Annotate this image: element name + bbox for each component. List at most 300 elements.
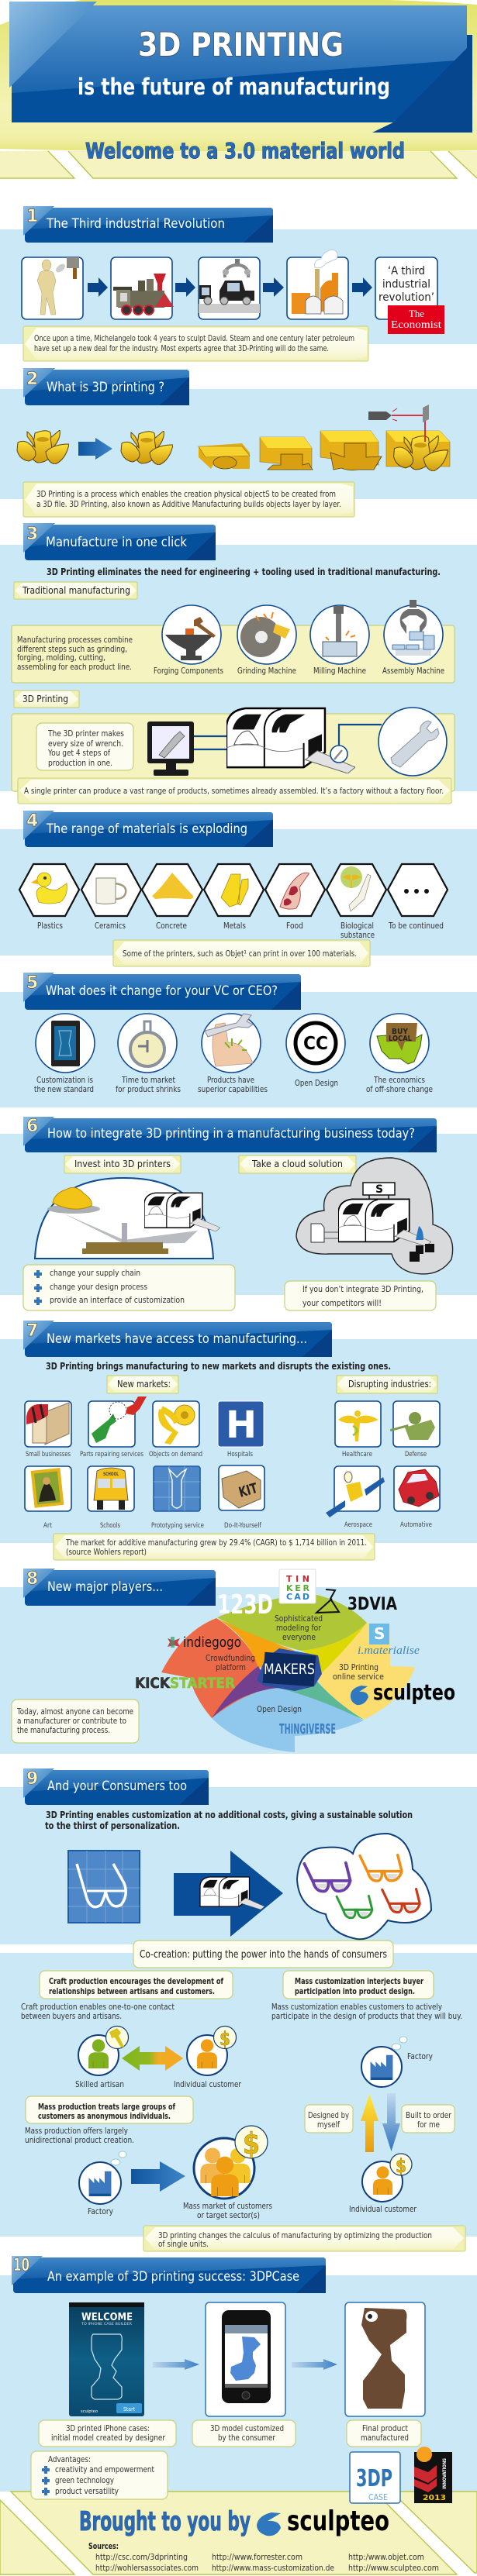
captions: case steps bbox=[39, 2420, 421, 2447]
labels: markets: Small businesses bbox=[26, 1451, 71, 1458]
arrow: step two bbox=[292, 2359, 337, 2370]
heading: section 4 bbox=[23, 811, 273, 847]
icon: customer: $ bbox=[396, 2155, 406, 2177]
label: makers bbox=[257, 1648, 322, 1691]
logo: 3DP Case: CASE bbox=[368, 2493, 388, 2502]
text block: advantages: creativity and empowerment bbox=[55, 2465, 154, 2474]
illustration: customized iPhone model bbox=[206, 2302, 285, 2416]
heading: section 2: What is 3D printing ? bbox=[47, 380, 164, 395]
title banner: 3D PRINTING bbox=[138, 26, 344, 64]
heading: section 7: New markets have access to manufacturing... bbox=[47, 1331, 307, 1347]
icon: customized phone bbox=[36, 1014, 95, 1073]
panel: mass production: customers as anonymous individuals. bbox=[38, 2112, 171, 2121]
text block: invest benefits: change your supply chain bbox=[50, 1269, 140, 1278]
callout: market growth: The market for additive manufacturing grew by 29.4% (CAGR) to $ 1,714 billion in 2011. bbox=[65, 1538, 367, 1548]
icon: layer two bbox=[260, 437, 313, 470]
labels: business changes: for product shrinks bbox=[116, 1085, 181, 1094]
panel: mass production bbox=[26, 2096, 193, 2123]
text: built to order: Built to order bbox=[406, 2111, 452, 2120]
icon: layer one bbox=[199, 443, 250, 469]
icon: printer in arrow bbox=[200, 1877, 264, 1910]
label: factory: Factory bbox=[407, 2052, 433, 2061]
labels: markets: Schools bbox=[100, 1522, 120, 1530]
callout: calculus of manufacturing: of single units. bbox=[158, 2240, 209, 2249]
quote: a third industrial revolution bbox=[378, 265, 434, 304]
heading: section 1 bbox=[23, 206, 273, 243]
labels: materials: To be continued bbox=[388, 921, 444, 931]
labels: business changes: Time to market bbox=[121, 1076, 175, 1085]
segment labels: everyone bbox=[282, 1633, 316, 1642]
quote: a third industrial revolution: revolution’ bbox=[378, 291, 434, 304]
segment: teal bbox=[279, 1678, 364, 1720]
segment labels: Crowdfunding bbox=[206, 1654, 255, 1663]
arrows between cards bbox=[88, 277, 372, 297]
icon: aerospace bbox=[326, 1466, 385, 1517]
icon: creative commons: CC bbox=[303, 1034, 328, 1054]
callout: Michelangelo note bbox=[23, 326, 368, 361]
logo: The Economist bbox=[388, 305, 444, 334]
text block: sources: http://csc.com/3dprinting bbox=[95, 2553, 188, 2562]
labels: materials: substance bbox=[340, 931, 375, 940]
labels: or target sector(s) bbox=[197, 2211, 260, 2220]
heading: section 10 bbox=[12, 2256, 326, 2293]
text block: advantages bbox=[31, 2451, 168, 2499]
text block: advantages: product versatility bbox=[55, 2487, 119, 2496]
arrow: one way bbox=[131, 2161, 185, 2192]
text: designed by myself bbox=[305, 2105, 353, 2133]
diagram: mass customization loop bbox=[305, 2037, 455, 2214]
heading: section 7 bbox=[23, 1321, 332, 1357]
tag: new markets bbox=[107, 1376, 178, 1393]
logo: The Economist: The bbox=[409, 308, 424, 319]
illustration: case app screen bbox=[69, 2302, 144, 2416]
hexagons: materials bbox=[19, 864, 448, 940]
text block: advantages: green technology bbox=[55, 2476, 114, 2485]
labels: Factory bbox=[88, 2207, 113, 2216]
segment: lime bbox=[301, 1623, 367, 1675]
callout: over 100 materials bbox=[113, 940, 370, 966]
icon: parts repair bbox=[88, 1396, 147, 1447]
callout: Michelangelo note: Once upon a time, Michelangelo took 4 years to sculpt David. Steam and one century later petroleum bbox=[34, 334, 354, 343]
text block: invest benefits bbox=[23, 1265, 235, 1310]
labels: business changes: The economics bbox=[373, 1076, 425, 1085]
badge: best of innovations 2013 bbox=[414, 2447, 452, 2503]
label: individual customer: Individual customer bbox=[349, 2205, 417, 2214]
heading: section 1: The Third industrial Revolution bbox=[46, 216, 225, 232]
labels: materials: Ceramics bbox=[95, 921, 126, 931]
title banner bbox=[0, 0, 477, 178]
tag: take a cloud solution bbox=[239, 1155, 356, 1173]
text: mass production description: Mass production offers largely bbox=[25, 2127, 128, 2136]
labels: Mass market of customers bbox=[183, 2202, 272, 2211]
callout: calculus of manufacturing bbox=[143, 2226, 465, 2251]
text block: sources: http://www.mass-customization.de bbox=[212, 2564, 334, 2573]
callout: definition of 3D printing: a 3D file. 3D Printing, also known as Additive Manufacturing builds objects layer by layer. bbox=[36, 500, 341, 509]
icon: metal bars bbox=[221, 874, 248, 907]
icon: buy local bbox=[370, 1014, 429, 1073]
icon: school bus: SCHOOL bbox=[103, 1472, 119, 1477]
illustration: co-creation flow bbox=[68, 1834, 431, 1939]
title banner: Welcome to a 3.0 material world bbox=[85, 138, 405, 164]
heading: section 10: An example of 3D printing success: 3DPCase bbox=[47, 2269, 299, 2285]
icon: buy local: LOCAL bbox=[389, 1035, 413, 1043]
quote: a third industrial revolution: industrial bbox=[382, 278, 430, 291]
segment labels: platform bbox=[216, 1663, 246, 1672]
panel: traditional manufacturing: forging, molding, cutting, bbox=[17, 653, 105, 663]
text block: wrench bbox=[36, 723, 133, 770]
callout: market growth: (source Wohlers report) bbox=[66, 1548, 147, 1557]
icon: artisan bbox=[78, 2026, 129, 2075]
grid: markets bbox=[25, 1396, 440, 1530]
logo: 123D: Autodesk bbox=[217, 1594, 241, 1600]
text block: competitors: your competitors will! bbox=[302, 1299, 382, 1308]
footer: brought to you by sculpteo: sculpteo bbox=[287, 2505, 389, 2537]
icon: grinding bbox=[237, 605, 296, 664]
heading: section 3: 3 bbox=[26, 525, 38, 544]
icon: refinery bbox=[292, 250, 343, 314]
heading: section 3 bbox=[23, 523, 216, 560]
captions: case steps: Final product bbox=[362, 2424, 408, 2433]
arrow: up bbox=[361, 2094, 378, 2152]
illustration: case app screen: WELCOME bbox=[81, 2312, 133, 2323]
labels: business changes: Products have bbox=[207, 1076, 254, 1085]
labels: markets: Art bbox=[43, 1522, 52, 1530]
heading: section 2 bbox=[23, 368, 189, 405]
text: craft description: Craft production enables one-to-one contact bbox=[21, 2003, 175, 2012]
panel: traditional manufacturing: Manufacturing processes combine bbox=[17, 635, 133, 645]
labels: materials: Food bbox=[286, 921, 303, 931]
illustration: balance scale bbox=[35, 1178, 220, 1259]
logo: Kickstarter: KICKSTARTER bbox=[135, 1675, 235, 1692]
tag: 3D printing: 3D Printing bbox=[22, 693, 68, 704]
text: designed by myself: myself bbox=[317, 2120, 340, 2130]
icon: prototyping bbox=[154, 1466, 200, 1511]
icon: car assembly bbox=[199, 259, 260, 313]
segment: orange bbox=[216, 1618, 295, 1668]
heading: section 6 bbox=[23, 1117, 437, 1152]
logo: 3DP Case: 3DP bbox=[356, 2465, 392, 2492]
icon: monitor bbox=[147, 721, 194, 776]
labels: processes: Assembly Machine bbox=[382, 666, 444, 676]
captions: case steps: 3D model customized bbox=[210, 2424, 284, 2433]
diagram: artisan and customer bbox=[75, 2026, 242, 2089]
heading: section 5 bbox=[23, 973, 301, 1010]
labels: business changes: of off-shore change bbox=[366, 1085, 433, 1094]
icon: tape measure bbox=[153, 1401, 199, 1447]
labels: markets: Automative bbox=[400, 1521, 432, 1529]
footer: brought to you by sculpteo: Brought to you by bbox=[79, 2506, 251, 2537]
icon: mug bbox=[96, 878, 126, 904]
heading: section 8: 8 bbox=[26, 1569, 38, 1589]
heading: section 2: 2 bbox=[26, 370, 38, 389]
callout: calculus of manufacturing: 3D printing changes the calculus of manufacturing by optimizing the production bbox=[158, 2231, 432, 2240]
panel: revolution timeline bbox=[22, 250, 444, 334]
labels: Skilled artisan bbox=[75, 2080, 124, 2089]
logo: 3DVIA bbox=[316, 1589, 397, 1614]
icon: buy local: BUY bbox=[392, 1028, 409, 1036]
text: section 9 lead bbox=[45, 1810, 413, 1831]
logo: Indiegogo bbox=[168, 1634, 241, 1651]
icon: David and hammer bbox=[37, 257, 79, 315]
text: section 9 lead: to the thirst of personalization. bbox=[45, 1820, 180, 1831]
labels: business changes bbox=[34, 1076, 433, 1094]
text block: co-creation: Co-creation: putting the power into the hands of consumers bbox=[140, 1948, 387, 1961]
icon: factory bbox=[361, 2037, 407, 2087]
logo: Tinkercad: CAD bbox=[286, 1592, 309, 1602]
callout: over 100 materials: Some of the printers, such as Objet¹ can print in over 100 materials. bbox=[123, 949, 357, 959]
heading: section 10: 10 bbox=[13, 2256, 29, 2275]
tag: invest into 3D printers: Invest into 3D printers bbox=[74, 1159, 171, 1169]
logo: 123D: 123D bbox=[217, 1589, 273, 1620]
panel: mass customization bbox=[283, 1971, 434, 1999]
heading: section 8: New major players... bbox=[47, 1579, 163, 1595]
icon: customer: $ bbox=[219, 2028, 230, 2050]
labels: business changes: Customization is bbox=[36, 1076, 93, 1085]
labels: business changes: Open Design bbox=[295, 1079, 338, 1088]
panel: craft production bbox=[40, 1971, 233, 1999]
icon: customer bbox=[187, 2026, 236, 2075]
labels: materials bbox=[37, 921, 444, 940]
label: makers: MAKERS bbox=[264, 1661, 315, 1678]
callout: factory without factory floor bbox=[18, 778, 451, 804]
labels: processes: Forging Components bbox=[154, 666, 223, 676]
heading: section 6: 6 bbox=[26, 1117, 38, 1136]
icon: sculpteo mark bbox=[257, 2512, 281, 2536]
segment labels bbox=[206, 1614, 384, 1714]
panel: craft production: Craft production encourages the development of bbox=[49, 1977, 223, 1986]
text block: wrench: every size of wrench. bbox=[48, 739, 123, 749]
panel: traditional manufacturing: assembling for each product line. bbox=[17, 663, 132, 672]
arrow: copy bbox=[78, 438, 112, 460]
arrow: step one bbox=[153, 2359, 199, 2370]
tag: disrupting industries: Disrupting industries: bbox=[348, 1379, 431, 1390]
title banner: is the future of manufacturing bbox=[78, 74, 390, 100]
icon: arm and wrench bbox=[202, 1014, 261, 1073]
panel: mass customization: Mass customization interjects buyer bbox=[295, 1977, 424, 1986]
illustration: case app screen: TO IPHONE CASE BUILDER bbox=[81, 2322, 132, 2326]
tag: take a cloud solution: Take a cloud solution bbox=[251, 1159, 343, 1169]
text block: sources: http:/www.objet.com bbox=[348, 2553, 424, 2562]
logo: Indiegogo: indiegogo bbox=[183, 1634, 241, 1651]
text block: anyone can manufacture: a manufacturer or contribute to bbox=[17, 1717, 126, 1726]
icon: milling bbox=[310, 605, 369, 664]
icon: duck bbox=[31, 873, 67, 904]
heading: section 4: The range of materials is exploding bbox=[46, 821, 247, 837]
tag: invest into 3D printers bbox=[64, 1155, 181, 1173]
text block: wrench: production in one. bbox=[48, 759, 112, 768]
heading: section 9: 9 bbox=[26, 1769, 38, 1789]
icon: hospital bbox=[218, 1401, 264, 1447]
icon: layer three bbox=[320, 431, 382, 470]
heading: section 6: How to integrate 3D printing in a manufacturing business today? bbox=[47, 1126, 415, 1142]
heading: section 1: 1 bbox=[26, 207, 38, 226]
text block: competitors bbox=[285, 1281, 436, 1310]
logo: Tinkercad: KER bbox=[286, 1583, 310, 1593]
icon: creative commons bbox=[286, 1014, 345, 1073]
callout: definition of 3D printing bbox=[23, 482, 354, 517]
logo: i.materialise: i.materialise bbox=[358, 1644, 420, 1657]
callout: definition of 3D printing: 3D Printing is a process which enables the creation physical objectS to be created from bbox=[36, 490, 336, 499]
labels: processes bbox=[154, 666, 444, 676]
logo: Tinkercad: TIN bbox=[286, 1574, 309, 1584]
logo: The Economist: Economist bbox=[391, 319, 441, 331]
arrow: two way bbox=[122, 2046, 183, 2071]
icon: kit box bbox=[219, 1465, 264, 1510]
heading: section 9 bbox=[23, 1768, 209, 1805]
labels: materials: Metals bbox=[223, 921, 246, 931]
illustration: cloud with printer: S bbox=[375, 1183, 383, 1196]
text: craft description bbox=[21, 2003, 175, 2021]
text block: invest benefits: provide an interface of customization bbox=[50, 1296, 185, 1305]
text block: sources: http://wohlersassociates.com bbox=[95, 2564, 199, 2573]
heading: section 4: 4 bbox=[26, 811, 38, 831]
logo: Tinkercad bbox=[279, 1569, 316, 1603]
text block: sources: http://www.sculpteo.com bbox=[348, 2564, 439, 2573]
icon: assembly bbox=[384, 600, 443, 664]
icons: business changes bbox=[34, 1014, 433, 1094]
icon: forging bbox=[162, 605, 221, 664]
captions: case steps: manufactured bbox=[361, 2433, 409, 2443]
segment: modeling bbox=[217, 1593, 367, 1651]
text: mass production description: unidirectional product creation. bbox=[25, 2136, 134, 2145]
illustration: case app screen: sculpteo bbox=[81, 2409, 98, 2414]
segment: online service bbox=[316, 1623, 415, 1720]
heading: section 3: Manufacture in one click bbox=[46, 535, 187, 550]
text block: advantages: Advantages: bbox=[48, 2455, 91, 2464]
icon: school bus bbox=[88, 1466, 134, 1511]
captions: case steps: initial model created by designer bbox=[51, 2433, 166, 2443]
icon: layer four with laser bbox=[368, 405, 450, 471]
logo: i.materialise bbox=[358, 1624, 420, 1657]
icon: small business bbox=[25, 1401, 71, 1447]
text: mass customization description: Mass customization enables customers to actively bbox=[271, 2003, 442, 2012]
text: section 7 lead: 3D Printing brings manufacturing to new markets and disrupts the existing ones. bbox=[46, 1361, 391, 1372]
panel: traditional manufacturing bbox=[12, 600, 455, 683]
text block: wrench: The 3D printer makes bbox=[47, 729, 124, 739]
heading: section 8 bbox=[23, 1569, 216, 1606]
text block: wrench: You get 4 steps of bbox=[47, 749, 110, 758]
segment labels: modeling for bbox=[276, 1624, 322, 1633]
illustration: case app screen: Start bbox=[123, 2406, 135, 2412]
icons: plus bullets bbox=[34, 1270, 42, 1305]
panel: craft production: relationships between artisans and customers. bbox=[49, 1987, 215, 1996]
logo: sculpteo: sculpteo bbox=[373, 1679, 455, 1705]
tag: disrupting industries bbox=[337, 1376, 437, 1393]
labels: processes: Grinding Machine bbox=[237, 666, 296, 676]
icon: blueprint glasses bbox=[68, 1851, 140, 1923]
badge: best of innovations 2013: 2013 bbox=[423, 2494, 446, 2502]
quote: a third industrial revolution: ‘A third bbox=[388, 265, 425, 277]
icon: automotive bbox=[394, 1466, 440, 1511]
text: mass customization description bbox=[271, 2003, 462, 2021]
segment: crowdfunding bbox=[161, 1618, 258, 1718]
labels: business changes: superior capabilities bbox=[198, 1085, 268, 1094]
heading: section 5: What does it change for your VC or CEO? bbox=[46, 983, 278, 999]
callout: Michelangelo note: have set up a new deal for the industry. Most experts agree that 3D-Printing will do the same. bbox=[34, 344, 329, 353]
heading: section 5: 5 bbox=[26, 973, 38, 993]
icon: healthcare bbox=[335, 1401, 381, 1447]
tag: new markets: New markets: bbox=[117, 1379, 171, 1390]
icon: original object bbox=[17, 430, 69, 464]
tag: traditional manufacturing: Traditional manufacturing bbox=[22, 584, 130, 596]
labels: markets: Hospitals bbox=[227, 1451, 253, 1458]
logo: 3DP Case bbox=[350, 2452, 400, 2503]
icon: wrench bbox=[378, 708, 447, 776]
icons: plus bullets bbox=[42, 2466, 50, 2495]
connectors bbox=[194, 725, 382, 749]
heading: section 9: And your Consumers too bbox=[47, 1779, 187, 1794]
footer background bbox=[0, 2492, 477, 2574]
text: built to order: for me bbox=[417, 2120, 440, 2130]
panel: 3D printing process bbox=[12, 708, 455, 791]
icon: concrete pile bbox=[152, 873, 193, 899]
text block: anyone can manufacture: the manufacturing process. bbox=[17, 1726, 110, 1735]
text: craft description: between buyers and artisans. bbox=[21, 2012, 122, 2021]
segment labels: Open Design bbox=[257, 1705, 302, 1714]
cloud of glasses bbox=[297, 1834, 431, 1939]
labels: markets: Do-It-Yourself bbox=[224, 1522, 262, 1530]
labels: markets: Defense bbox=[405, 1451, 427, 1458]
icon: mass market bbox=[194, 2126, 268, 2199]
text block: anyone can manufacture: Today, almost anyone can become bbox=[16, 1707, 133, 1717]
labels: materials: Concrete bbox=[156, 921, 187, 931]
diagram: additive layers bbox=[17, 405, 450, 471]
text: built to order bbox=[402, 2105, 455, 2133]
icon: kit box: KIT bbox=[237, 1480, 260, 1501]
segment labels: online service bbox=[333, 1672, 384, 1682]
illustration: final printed case bbox=[345, 2302, 425, 2416]
labels: markets: Parts repairing services bbox=[80, 1451, 143, 1458]
text block: sources: Sources: bbox=[88, 2542, 119, 2551]
segment: open design bbox=[212, 1688, 364, 1752]
segment labels: Sophisticated bbox=[275, 1614, 323, 1624]
text block: co-creation bbox=[133, 1941, 393, 1968]
chart: makers ecosystem bbox=[135, 1569, 455, 1752]
labels: processes: Milling Machine bbox=[313, 666, 366, 676]
labels bbox=[75, 2080, 242, 2089]
labels: Individual customer bbox=[174, 2080, 242, 2089]
labels: materials: Biological bbox=[340, 921, 374, 931]
icon: customer bbox=[362, 2154, 412, 2202]
tag: 3D printing bbox=[14, 690, 79, 708]
icon: defense bbox=[390, 1401, 440, 1447]
labels: materials: Plastics bbox=[37, 921, 63, 931]
labels: markets bbox=[26, 1451, 432, 1530]
text block: sources: http://www.forrester.com bbox=[212, 2553, 302, 2562]
logo: Thingiverse: THINGIVERSE bbox=[279, 1721, 336, 1737]
labels: markets: Aerospace bbox=[344, 1521, 372, 1529]
panel: traditional manufacturing: different steps such as grinding, bbox=[17, 645, 127, 654]
badge: best of innovations 2013: INNOVATIONS bbox=[442, 2458, 448, 2489]
segment labels: 3D Printing bbox=[339, 1663, 378, 1672]
icon: small wrench circle bbox=[330, 746, 347, 763]
text block: anyone can manufacture bbox=[12, 1700, 139, 1743]
arrow: printer bbox=[174, 1851, 283, 1937]
text block: competitors: If you don’t integrate 3D Printing, bbox=[302, 1285, 423, 1294]
icon: biological bbox=[340, 866, 371, 911]
text: mass production description bbox=[25, 2127, 134, 2145]
logo: sculpteo bbox=[351, 1679, 455, 1705]
tag: traditional manufacturing bbox=[14, 582, 137, 599]
logo: 3DVIA: 3DVIA bbox=[347, 1595, 397, 1614]
panel: mass customization: participation into product design. bbox=[295, 1987, 415, 1996]
labels: business changes: the new standard bbox=[34, 1085, 94, 1094]
captions: case steps: by the consumer bbox=[218, 2433, 276, 2443]
icon: stopwatch bbox=[118, 1014, 177, 1073]
text block: sources bbox=[88, 2542, 439, 2573]
text block: invest benefits: change your design process bbox=[50, 1283, 147, 1292]
segment: purple bbox=[212, 1666, 281, 1718]
